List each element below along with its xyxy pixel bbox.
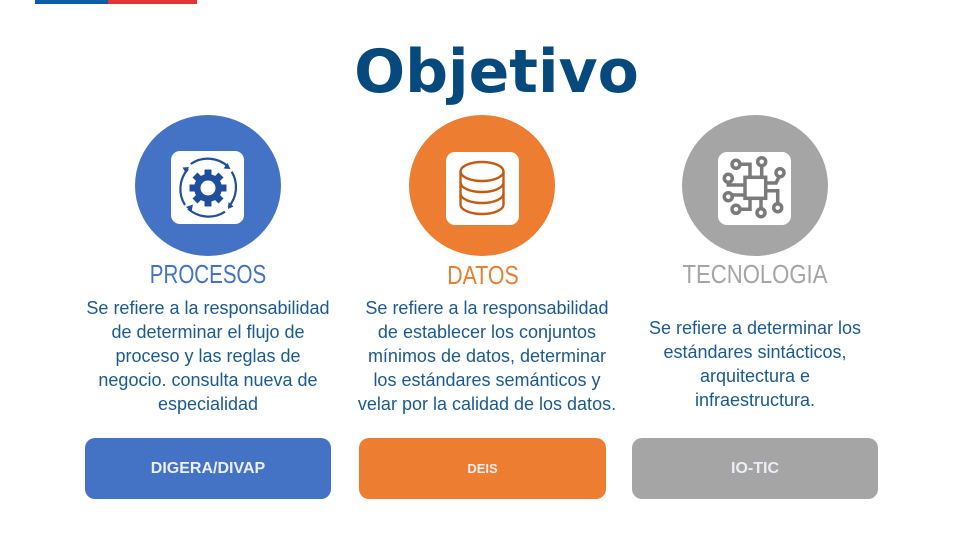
- text: datos: de establecer los conjuntos: [378, 322, 596, 342]
- text: procesos: de determinar el flujo de: [111, 322, 305, 342]
- text: procesos: negocio. consulta nueva de: [98, 370, 318, 390]
- text: procesos: Se refiere a la responsabilidad: [86, 298, 330, 318]
- text: tecnologia: infraestructura.: [695, 390, 815, 410]
- top flag bar: [35, 0, 197, 4]
- text: tecnologia: Se refiere a determinar los: [649, 318, 861, 338]
- heading: datos: DATOS: [447, 260, 519, 290]
- text: datos: Se refiere a la responsabilidad: [365, 298, 609, 318]
- heading: tecnologia: TECNOLOGIA: [683, 259, 827, 289]
- button: deis: [359, 438, 606, 499]
- panel: procesos: [85, 115, 331, 499]
- text: tecnologia: arquitectura e: [700, 366, 810, 386]
- title: Objetivo: [354, 37, 639, 107]
- heading: procesos: PROCESOS: [150, 259, 266, 289]
- text: tecnologia: [649, 318, 861, 410]
- button: digera/divap: [85, 438, 331, 499]
- text: datos: [358, 298, 616, 414]
- panel: tecnologia: [632, 115, 878, 499]
- text: datos: los estándares semánticos y: [373, 370, 601, 390]
- panel: datos: [358, 115, 616, 499]
- button: io-tic: [632, 438, 878, 499]
- text: datos: mínimos de datos, determinar: [368, 346, 606, 366]
- button: digera/divap: DIGERA/DIVAP: [151, 460, 265, 477]
- text: procesos: [86, 298, 330, 414]
- text: procesos: especialidad: [158, 394, 258, 414]
- icon: gear in circle: [135, 115, 281, 256]
- icon: database in circle: [409, 115, 555, 256]
- text: tecnologia: estándares sintácticos,: [663, 342, 847, 362]
- button: deis: DEIS: [467, 461, 498, 476]
- text: datos: velar por la calidad de los datos.: [358, 394, 616, 414]
- button: io-tic: IO-TIC: [731, 460, 779, 477]
- text: procesos: proceso y las reglas de: [115, 346, 301, 366]
- icon: circuit chip in circle: [682, 115, 828, 256]
